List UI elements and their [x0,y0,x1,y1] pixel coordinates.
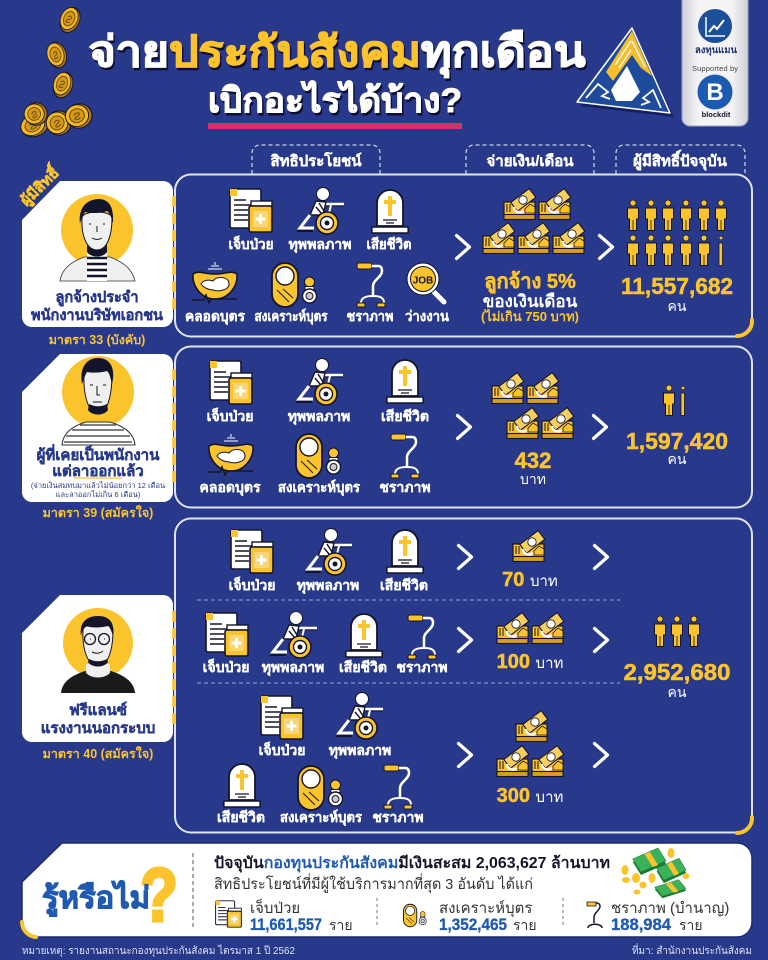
icon: logo blockdit: B [706,79,724,106]
stat: old age pension: ชราภาพ (บำนาญ) [611,900,729,917]
contribution text: ลูกจ้าง 5% [484,270,576,295]
card title [31,289,164,324]
option 100 baht labels: ชราภาพ [396,659,448,675]
option 70 baht labels: เสียชีวิต [380,577,428,593]
option 300 baht labels: ทุพพลภาพ [329,742,391,759]
option 100 baht labels: เสียชีวิต [339,659,387,675]
people icons [664,385,685,416]
arrow [594,744,608,766]
arrow [458,546,472,568]
yellow corner [737,817,752,833]
yellow corner [737,320,752,336]
column header: current rights holders [616,145,745,174]
benefit labels: สงเคราะห์บุตร [254,308,328,325]
amount: 432 [515,448,551,473]
heading: รู้หรือไม่ [42,880,150,917]
option 100 baht labels: ทุพพลภาพ [262,659,324,676]
benefit labels: เจ็บป่วย [207,407,253,424]
note: (จ่ายเงินสมทบมาแล้วไม่น้อยกว่า 12 เดือน [31,481,165,490]
icon: logo ลงทุนแมน [698,9,732,43]
money icons [483,189,585,254]
blockdit name: blockdit [702,110,731,119]
benefit labels: ว่างงาน [405,308,449,324]
benefit labels: ทุพพลภาพ [288,236,352,253]
column header: payment per month: จ่ายเงิน/เดือน [486,152,574,170]
portrait [61,608,135,693]
footnote: note: หมายเหตุ: รายงานสถานะกองทุนประกันสังคม ไตรมาส 1 ปี 2562 [22,944,295,957]
benefit labels [200,407,431,496]
option 100 baht icons [206,612,436,659]
people icons [628,200,726,266]
panel: section 40 [175,518,752,833]
underline [74,477,122,479]
option 300 baht labels: สงเคราะห์บุตร [280,809,362,826]
section label: มาตรา 40 (สมัครใจ) [43,746,153,761]
contribution text: ของเงินเดือน [483,291,578,311]
benefit labels: คลอดบุตร [185,308,245,325]
falling coins [17,4,95,141]
portrait [60,194,135,281]
column header: current rights holders: ผู้มีสิทธิ์ปัจจุบัน [633,149,728,171]
member count: 2,952,680 [624,659,730,685]
yellow corner [22,922,36,937]
panel: did you know [22,843,752,938]
benefit labels: ชราภาพ [379,479,431,495]
amount 300: 300 บาท [497,785,563,807]
subtitle: เบิกอะไรได้บ้าง? [208,80,462,120]
stat: old age pension: 188,984 [611,915,672,934]
people icons [654,616,700,646]
option 70 baht labels: เจ็บป่วย [229,576,275,593]
unit: คน [668,298,687,314]
benefit labels [185,235,449,325]
arrow [600,236,612,258]
arrow [594,546,608,568]
column header: benefits [252,145,380,174]
arrow [458,416,470,438]
option 300 baht labels: เสียชีวิต [217,809,265,825]
top 3 intro: สิทธิประโยชน์ที่มีผู้ใช้บริการมากที่สุด 3 อันดับ ได้แก่ [214,873,533,894]
footnote: source: ที่มา: สำนักงานประกันสังคม [632,943,752,957]
rotated label: rights holder: ผู้มีสิทธิ์ [15,160,65,210]
card title: ลูกจ้างประจำ [56,289,138,307]
card title: แรงงานนอกระบบ [41,720,155,737]
option 70 baht icons [231,528,423,575]
member count: 1,597,420 [626,428,728,454]
option 300 baht labels: เจ็บป่วย [259,741,305,758]
panel: section 33 [175,174,752,336]
big question mark: ? [140,853,178,938]
benefit labels: เสียชีวิต [366,236,412,252]
social security logo [577,28,674,117]
section label: มาตรา 39 (สมัครใจ) [43,505,153,520]
fund text: ปัจจุบันกองทุนประกันสังคมมีเงินสะสม 2,063,627 ล้านบาท [214,854,610,873]
benefit labels: ชราภาพ [346,308,394,324]
stat: sickness: 11,661,557 [250,915,322,934]
card: employees [22,181,174,327]
title underline [208,123,462,129]
icon: money pile [622,848,690,898]
stat: old age pension: ราย [679,917,703,933]
unit: บาท [520,471,546,487]
stat: old age pension [587,900,729,934]
contribution text: (ไม่เกิน 750 บาท) [481,308,579,324]
arrow [594,416,606,438]
sponsor card [682,0,748,126]
column header: payment per month [466,145,594,174]
option 100 baht labels [203,658,448,676]
option 70 baht labels [229,576,428,594]
stat: child allowance: ราย [513,917,537,933]
contribution text [481,270,579,324]
option 300 baht labels: ชราภาพ [372,809,424,825]
card title: ผู้ที่เคยเป็นพนักงาน [37,444,160,465]
stat: sickness: ราย [329,917,353,933]
option 100 baht labels: เจ็บป่วย [203,658,249,675]
money icon [513,531,545,562]
panel: section 39 [175,346,752,508]
benefit labels: คลอดบุตร [200,479,261,496]
note: และลาออกไม่เกิน 6 เดือน) [56,490,141,499]
benefit labels: เสียชีวิต [381,408,429,424]
section label: มาตรา 33 (บังคับ) [49,333,145,347]
card title: พนักงานบริษัทเอกชน [31,306,164,324]
benefit labels: เจ็บป่วย [228,235,274,252]
amount 70: 70 บาท [502,569,558,591]
money icons [492,373,574,438]
arrow [456,236,470,258]
arrow [594,628,608,652]
money icons [497,613,564,644]
benefit icons [208,358,423,478]
stat: child allowance [404,900,537,934]
stat: child allowance: 1,352,465 [439,915,507,934]
stat: sickness: เจ็บป่วย [250,898,300,917]
logo name: ลงทุนแมน [695,45,738,56]
portrait [62,356,135,445]
money icons [497,711,564,776]
card: freelance [22,595,174,742]
benefit icons [192,188,444,307]
card title [41,701,155,737]
card: former employees [22,354,174,502]
arrow [458,744,472,766]
member count: 11,557,682 [621,273,733,299]
option 300 baht icons [224,692,412,810]
column header: benefits: สิทธิประโยชน์ [270,151,362,170]
card title: แต่ลาออกแล้ว [52,463,144,480]
option 70 baht labels: ทุพพลภาพ [297,577,359,594]
unit: คน [668,684,687,700]
benefit labels: ทุพพลภาพ [288,408,350,425]
benefit labels: สงเคราะห์บุตร [278,479,360,496]
stat: child allowance: สงเคราะห์บุตร [439,900,532,918]
card title: ฟรีแลนซ์ [69,701,127,719]
unit: คน [668,451,687,467]
note [31,481,165,499]
title: จ่ายประกันสังคม ทุกเดือน [88,28,586,78]
supported by: Supported by [692,64,738,73]
card title [37,444,160,480]
arrow [458,628,472,652]
amount 100: 100 บาท [497,651,563,673]
stat: sickness [216,898,353,934]
option 300 baht labels [217,741,424,826]
